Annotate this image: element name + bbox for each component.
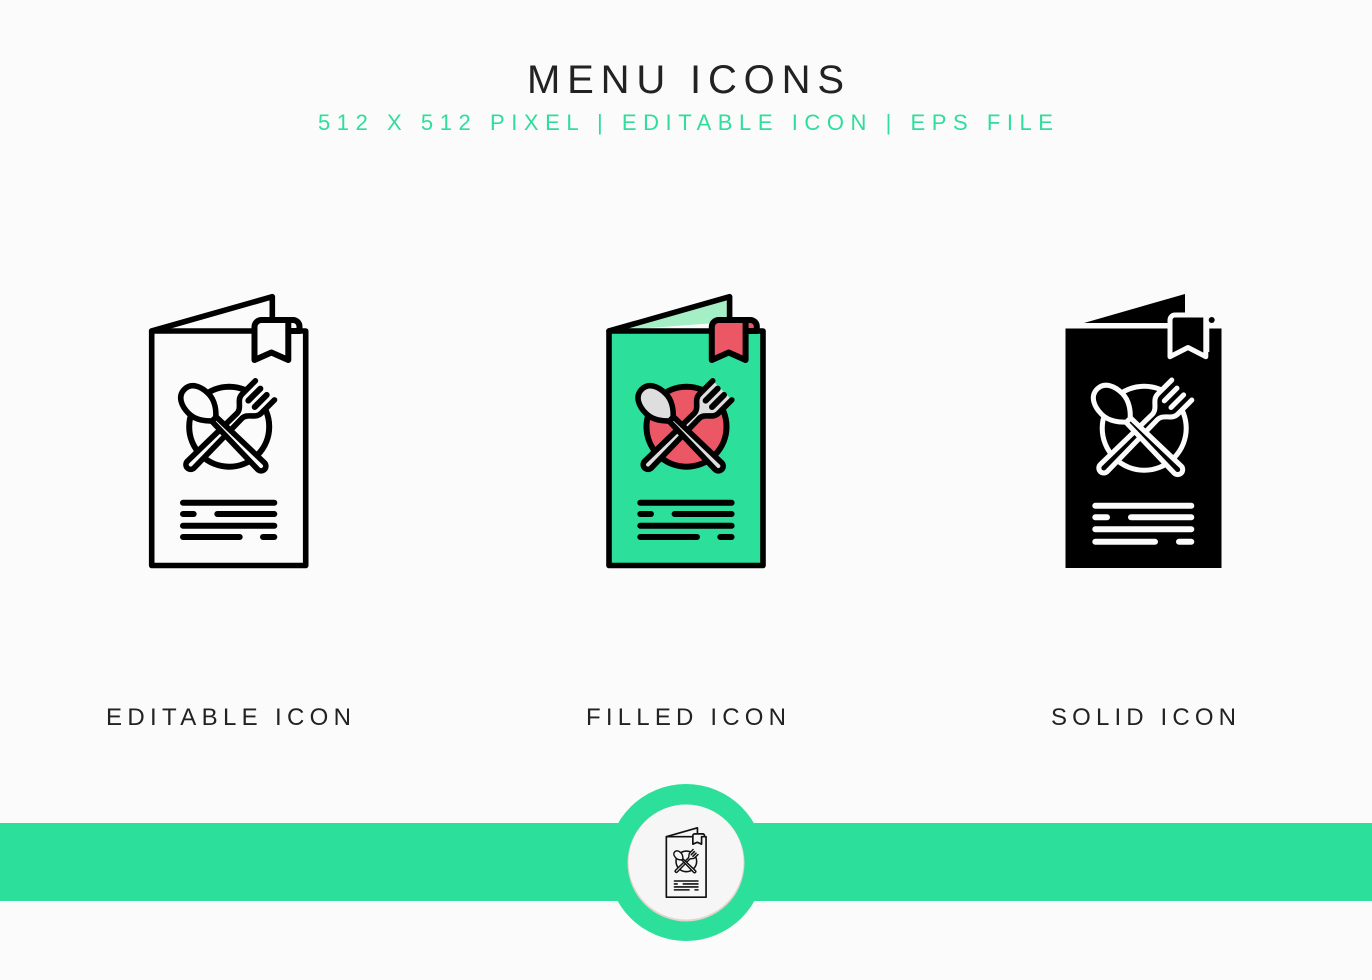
label: solid icon: SOLID ICON [1051,704,1236,731]
icon: filled colour menu [609,297,763,566]
footer badge ring [608,784,764,941]
label: editable icon: EDITABLE ICON [106,704,351,731]
footer band [0,823,1372,901]
title: MENU ICONS [527,58,844,102]
label: filled icon: FILLED ICON [586,704,786,731]
subtitle: 512 X 512 PIXEL | EDITABLE ICON | EPS FILE [318,110,1053,135]
icon: editable outline menu [152,297,306,566]
icon: solid black menu [1066,294,1222,568]
footer badge disc [628,804,744,922]
icon: small menu in badge [666,828,706,897]
